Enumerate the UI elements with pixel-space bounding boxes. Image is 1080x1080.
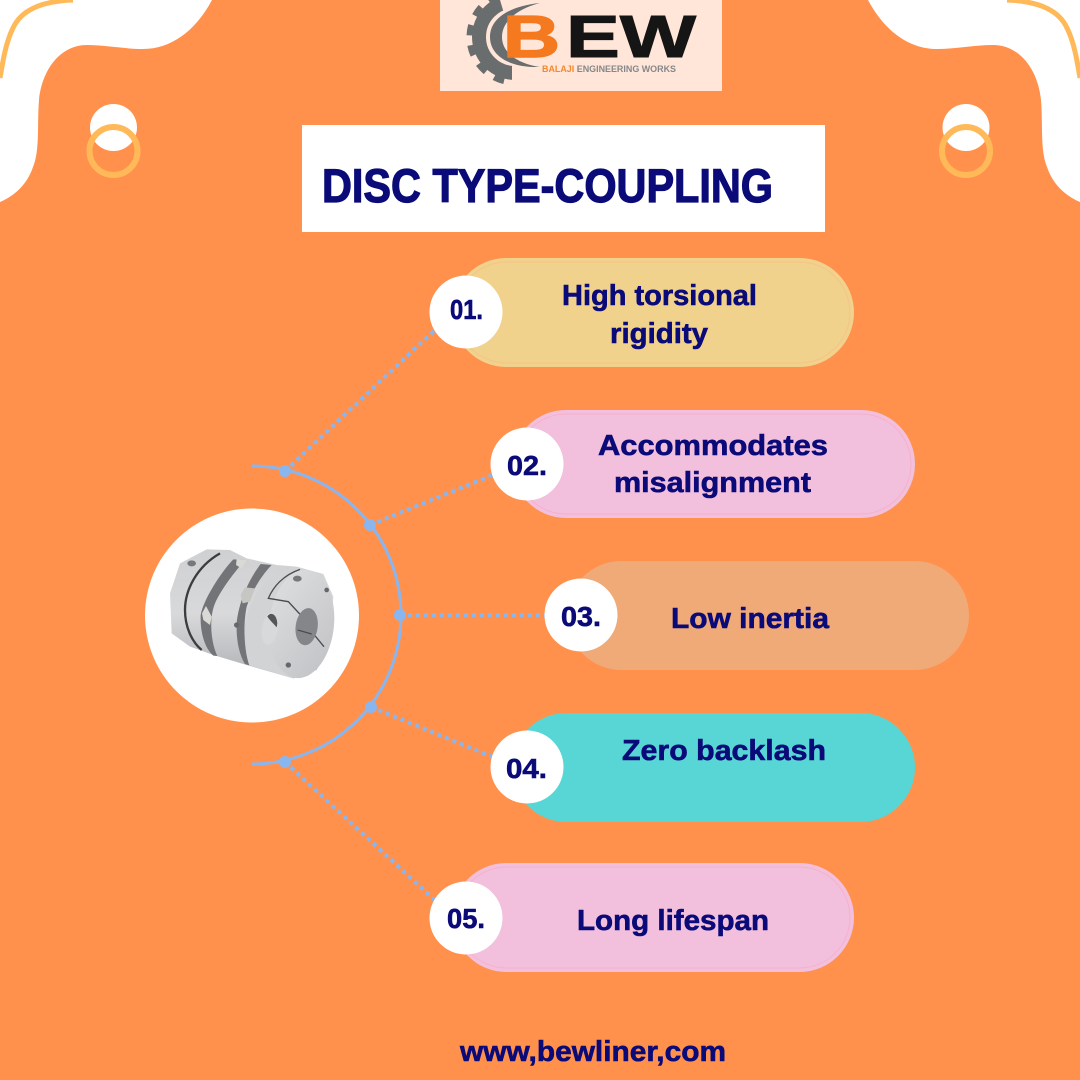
screw holes bbox=[324, 588, 329, 592]
label: High torsional bbox=[562, 280, 757, 312]
website: www,bewliner,com bbox=[459, 1036, 726, 1068]
number badge bbox=[544, 578, 618, 652]
hub side bbox=[245, 567, 300, 678]
pill bbox=[452, 258, 854, 367]
number badge bbox=[490, 428, 564, 500]
top-right corner wave bbox=[868, 0, 1080, 202]
first gap bbox=[201, 559, 245, 656]
first washer bbox=[202, 606, 212, 625]
back hole bbox=[187, 560, 196, 566]
logo panel bbox=[440, 0, 722, 91]
right decorative circles bbox=[942, 104, 990, 175]
top-left corner wave bbox=[0, 0, 212, 202]
left decorative circles bbox=[90, 104, 138, 175]
label: Low inertia bbox=[671, 603, 830, 635]
item 02 bbox=[490, 410, 915, 518]
first slit bbox=[185, 553, 220, 650]
label: Zero backlash bbox=[622, 735, 826, 767]
logo letters EW: EW bbox=[566, 4, 696, 70]
second gap bbox=[237, 564, 272, 665]
pill bbox=[452, 863, 854, 972]
item 02: 02. bbox=[507, 450, 547, 481]
product image: disc coupling bbox=[145, 508, 359, 722]
item 01: 01. bbox=[450, 294, 483, 325]
label: Long lifespan bbox=[577, 905, 769, 937]
clamp slit bbox=[268, 569, 324, 647]
pill bbox=[512, 713, 915, 822]
clamp hole bbox=[259, 611, 281, 646]
item 01 bbox=[430, 258, 854, 367]
pill bbox=[567, 561, 969, 670]
item 02: misalignment bbox=[614, 467, 811, 499]
logo tagline: BALAJI ENGINEERING WORKS bbox=[542, 64, 676, 75]
logo letter B: B bbox=[503, 4, 560, 70]
number badge bbox=[430, 882, 502, 954]
number badge bbox=[490, 730, 564, 804]
body silhouette bbox=[170, 549, 333, 678]
front face bbox=[264, 567, 340, 681]
item 05 bbox=[430, 863, 854, 972]
item 03 bbox=[544, 561, 969, 670]
second washer bbox=[241, 587, 255, 603]
number badge bbox=[430, 276, 502, 348]
label: Accommodates bbox=[598, 430, 828, 462]
bore bbox=[293, 607, 320, 647]
item 05: 05. bbox=[447, 903, 485, 934]
title panel bbox=[302, 125, 825, 232]
item 04 bbox=[490, 713, 915, 822]
title: DISC TYPE-COUPLING bbox=[322, 159, 773, 212]
item 01: rigidity bbox=[610, 318, 708, 350]
item 03: 03. bbox=[561, 601, 601, 632]
pill bbox=[512, 410, 915, 518]
icon: logo gear bbox=[466, 0, 540, 84]
connector arc with dotted lines bbox=[252, 325, 550, 905]
item 04: 04. bbox=[506, 753, 547, 784]
